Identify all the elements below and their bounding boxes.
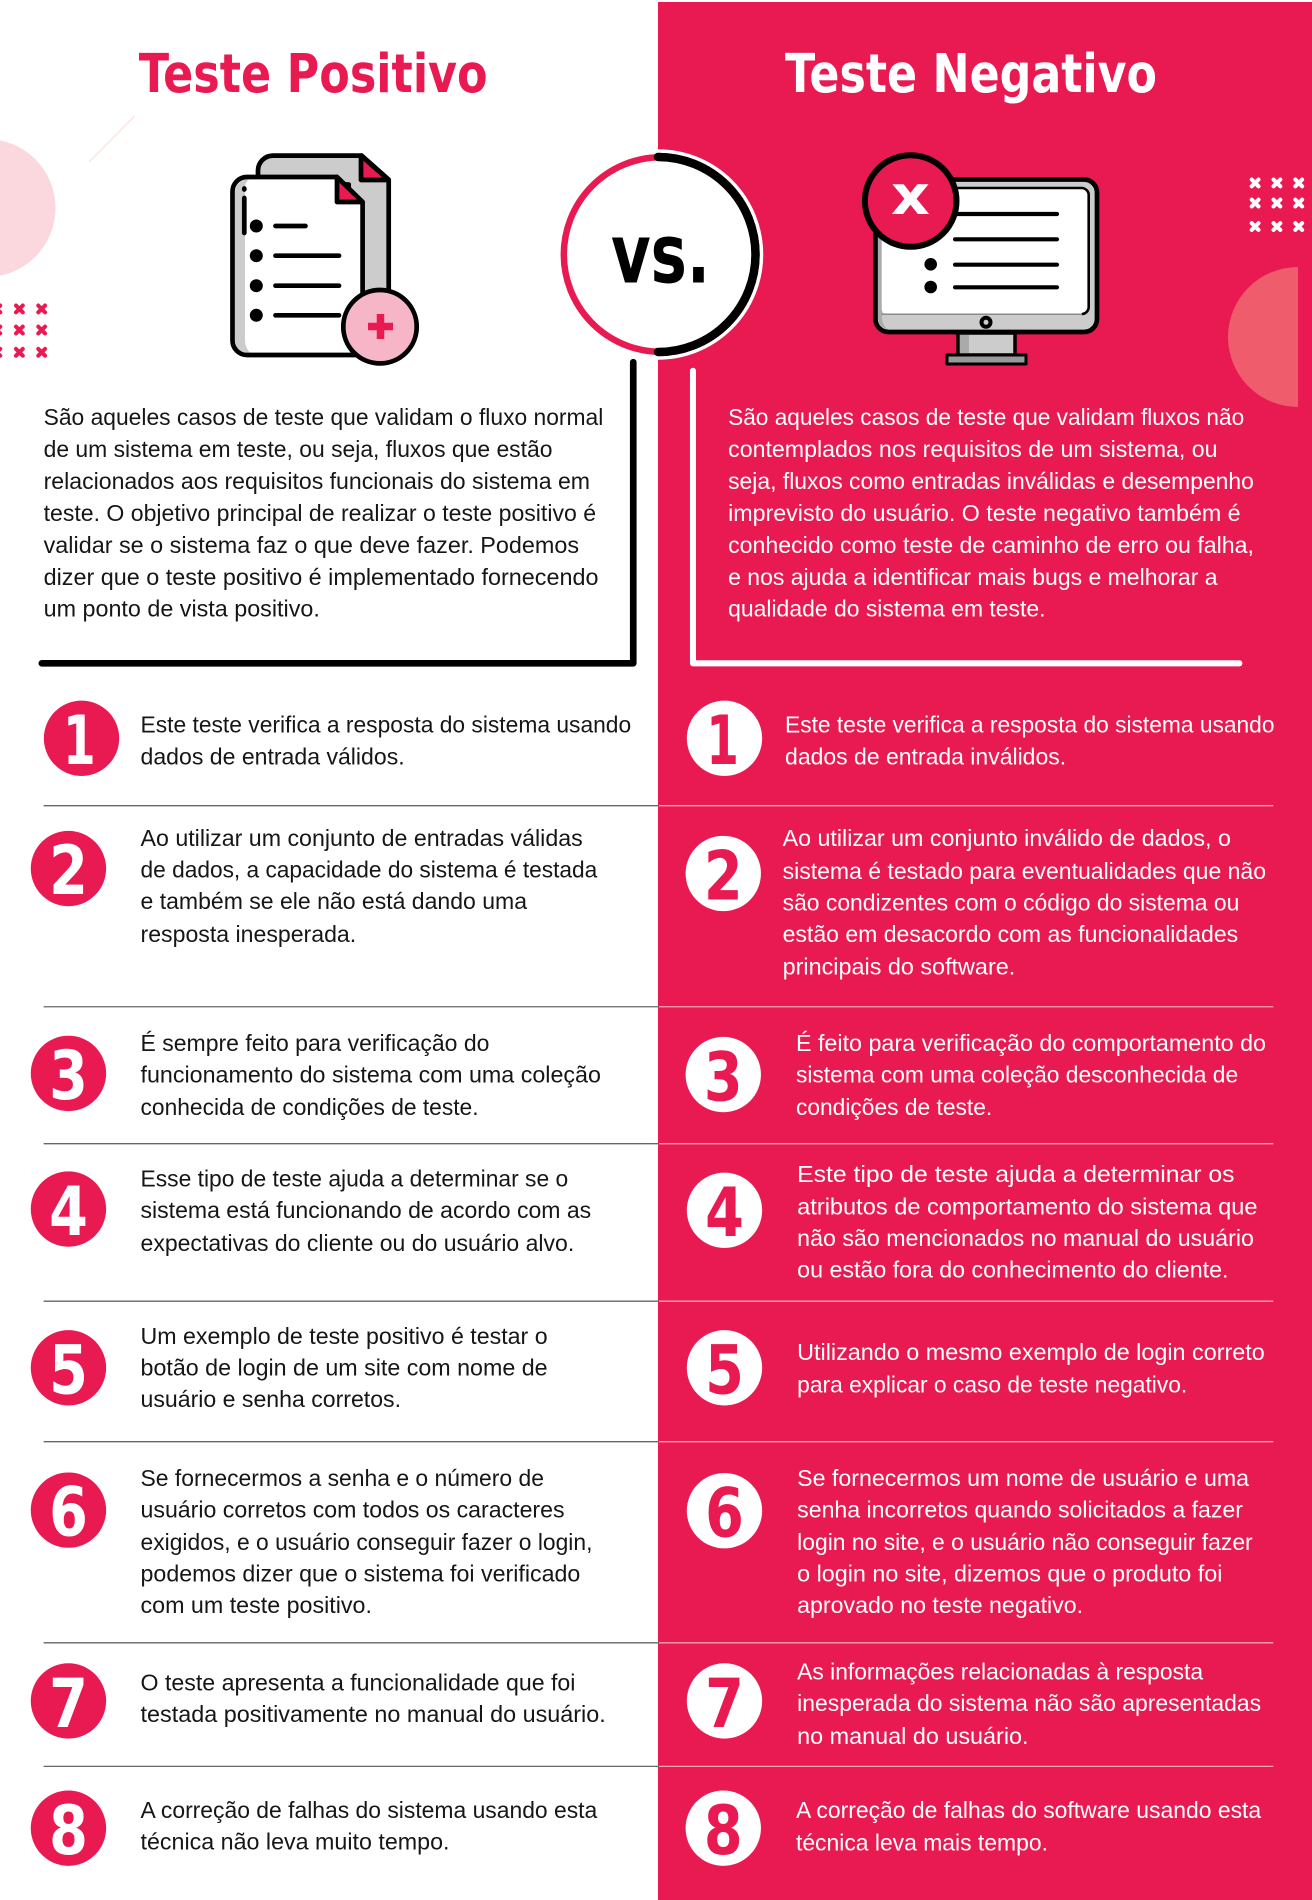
text block: positive test definition: relacionados aos requisitos funcionais do sistema em	[44, 468, 590, 494]
positive row 8: A correção de falhas do sistema usando esta	[141, 1797, 597, 1823]
negative row 1: dados de entrada inválidos.	[785, 743, 1066, 769]
text block: negative test definition: imprevisto do usuário. O teste negativo também é	[728, 500, 1241, 526]
text block: negative test definition: e nos ajuda a identificar mais bugs e melhorar a	[728, 564, 1218, 590]
positive row 6: exigidos, e o usuário conseguir fazer o login,	[141, 1529, 592, 1555]
negative row 5: para explicar o caso de teste negativo.	[797, 1372, 1187, 1398]
text block: negative test definition: contemplados nos requisitos de um sistema, ou	[728, 436, 1218, 462]
positive row 4: Esse tipo de teste ajuda a determinar se o	[141, 1166, 568, 1192]
positive row 8: técnica não leva muito tempo.	[141, 1828, 449, 1854]
positive row 5	[31, 1323, 548, 1412]
negative row 2: 2	[704, 836, 743, 915]
negative row 6: login no site, e o usuário não conseguir fazer	[797, 1529, 1253, 1555]
negative row 8: 8	[704, 1791, 743, 1870]
positive row 5: Um exemplo de teste positivo é testar o	[141, 1323, 548, 1349]
positive row 3: É sempre feito para verificação do	[141, 1030, 489, 1056]
positive row 2	[31, 825, 597, 947]
positive row 2: resposta inesperada.	[141, 921, 356, 947]
negative row 1	[687, 701, 1274, 780]
positive row 7	[31, 1663, 606, 1743]
text block: positive test definition: teste. O objetivo principal de realizar o teste positivo é	[44, 500, 596, 526]
text block: negative test definition	[728, 404, 1254, 622]
text block: positive test definition	[44, 404, 603, 622]
vs badge	[563, 151, 762, 358]
negative row 3	[686, 1030, 1266, 1120]
heading: Teste Negativo: Teste Negativo	[785, 43, 1157, 105]
text block: positive test definition: validar se o sistema faz o que deve fazer. Podemos	[44, 532, 579, 558]
negative row 2	[686, 825, 1266, 980]
positive row 4: sistema está funcionando de acordo com as	[141, 1197, 591, 1223]
positive row 7: testada positivamente no manual do usuário.	[141, 1701, 606, 1727]
positive row 2: 2	[49, 831, 88, 910]
negative row 3: sistema com uma coleção desconhecida de	[796, 1061, 1238, 1087]
negative row 6: Se fornecermos um nome de usuário e uma	[797, 1465, 1249, 1491]
negative row 6: o login no site, dizemos que o produto foi	[797, 1561, 1222, 1587]
text block: positive test definition: de um sistema em teste, ou seja, fluxos que estão	[44, 436, 552, 462]
negative row 2: principais do software.	[783, 954, 1015, 980]
decoration: faint diagonal line	[89, 116, 135, 162]
negative row 4: ou estão fora do conhecimento do cliente.	[797, 1257, 1228, 1283]
positive row 6	[31, 1465, 592, 1618]
icon: monitor with error badge	[865, 155, 1097, 364]
negative row 5: 5	[705, 1331, 744, 1410]
negative row 4: 4	[705, 1173, 744, 1252]
negative row 4	[687, 1161, 1258, 1283]
positive row 3: 3	[49, 1036, 88, 1115]
positive row 1: 1	[63, 701, 96, 780]
positive row 7: 7	[49, 1664, 88, 1743]
negative row 8	[686, 1790, 1261, 1870]
positive row 1	[44, 701, 631, 780]
positive row 6: Se fornecermos a senha e o número de	[141, 1465, 544, 1491]
decoration: left pink circle	[0, 139, 56, 277]
negative row 4: atributos de comportamento do sistema que	[797, 1194, 1258, 1220]
negative row 3: É feito para verificação do comportamento do	[796, 1030, 1266, 1056]
positive row 1: dados de entrada válidos.	[141, 743, 405, 769]
positive row 4: expectativas do cliente ou do usuário alvo.	[141, 1230, 574, 1256]
negative row 3: condições de teste.	[796, 1094, 992, 1120]
positive row 7: O teste apresenta a funcionalidade que foi	[141, 1670, 575, 1696]
positive row 5: 5	[49, 1331, 88, 1410]
icon: documents with plus	[232, 156, 417, 363]
positive row 6: usuário corretos com todos os caracteres	[141, 1496, 565, 1522]
negative row 2: estão em desacordo com as funcionalidades	[783, 921, 1238, 947]
positive row 1: Este teste verifica a resposta do sistema usando	[141, 711, 631, 737]
icon: monitor with error badge: x	[891, 164, 930, 227]
positive row 4: 4	[49, 1172, 88, 1251]
negative row 2: sistema é testado para eventualidades que não	[783, 858, 1266, 884]
negative row 5	[687, 1330, 1265, 1410]
negative row 8: A correção de falhas do software usando esta	[796, 1797, 1261, 1823]
positive row 3	[31, 1030, 601, 1120]
text block: negative test definition: qualidade do sistema em teste.	[728, 596, 1046, 622]
positive row 2: e também se ele não está dando uma	[141, 888, 527, 914]
text block: negative test definition: São aqueles casos de teste que validam fluxos não	[728, 404, 1244, 430]
negative row 7: inesperada do sistema não são apresentadas	[797, 1690, 1261, 1716]
negative row 2: são condizentes com o código do sistema ou	[783, 889, 1239, 915]
negative row 4: Este tipo de teste ajuda a determinar os	[797, 1161, 1235, 1187]
panel: negative test background	[658, 2, 1312, 1900]
frame: black corner line	[42, 362, 633, 663]
negative row 3: 3	[704, 1037, 743, 1116]
heading: Teste Positivo: Teste Positivo	[139, 43, 488, 105]
vs badge: vs.	[611, 208, 710, 303]
negative row 7: As informações relacionadas à resposta	[797, 1659, 1203, 1685]
text block: positive test definition: um ponto de vista positivo.	[44, 596, 320, 622]
negative row 6: aprovado no teste negativo.	[797, 1592, 1083, 1618]
decoration: right cross pattern	[1252, 180, 1302, 230]
negative row 6: senha incorretos quando solicitados a fazer	[797, 1496, 1243, 1522]
negative row 6: 6	[705, 1474, 744, 1553]
positive row 5: botão de login de um site com nome de	[141, 1355, 548, 1381]
negative row 5: Utilizando o mesmo exemplo de login correto	[797, 1339, 1265, 1365]
positive row 8	[31, 1790, 597, 1870]
positive row 6: podemos dizer que o sistema foi verificado	[141, 1561, 580, 1587]
negative row 6	[687, 1465, 1253, 1618]
decoration: left cross pattern	[0, 306, 45, 356]
frame: white corner line	[693, 371, 1239, 663]
positive row 8: 8	[49, 1791, 88, 1870]
negative row 7: 7	[705, 1664, 744, 1743]
text block: negative test definition: conhecido como teste de caminho de erro ou falha,	[728, 532, 1254, 558]
negative row 2: Ao utilizar um conjunto inválido de dados, o	[783, 825, 1231, 851]
negative row 8: técnica leva mais tempo.	[796, 1830, 1048, 1856]
positive row 4	[31, 1166, 591, 1256]
decoration: right semicircle	[1228, 267, 1298, 407]
text block: positive test definition: dizer que o teste positivo é implementado fornecendo	[44, 564, 598, 590]
positive row 5: usuário e senha corretos.	[141, 1386, 401, 1412]
negative row 1: Este teste verifica a resposta do sistema usando	[785, 711, 1274, 737]
negative row 1: 1	[706, 701, 739, 780]
positive row 6: com um teste positivo.	[141, 1592, 372, 1618]
positive row 3: conhecida de condições de teste.	[141, 1094, 479, 1120]
positive row 3: funcionamento do sistema com uma coleção	[141, 1061, 601, 1087]
positive row 2: de dados, a capacidade do sistema é testada	[141, 857, 597, 883]
negative row 7	[687, 1659, 1261, 1749]
negative row 7: no manual do usuário.	[797, 1723, 1029, 1749]
text block: positive test definition: São aqueles casos de teste que validam o fluxo normal	[44, 404, 603, 430]
negative row 4: não são mencionados no manual do usuário	[797, 1225, 1254, 1251]
positive row 2: Ao utilizar um conjunto de entradas válidas	[141, 825, 583, 851]
positive row 6: 6	[49, 1473, 88, 1552]
text block: negative test definition: seja, fluxos como entradas inválidas e desempenho	[728, 468, 1254, 494]
